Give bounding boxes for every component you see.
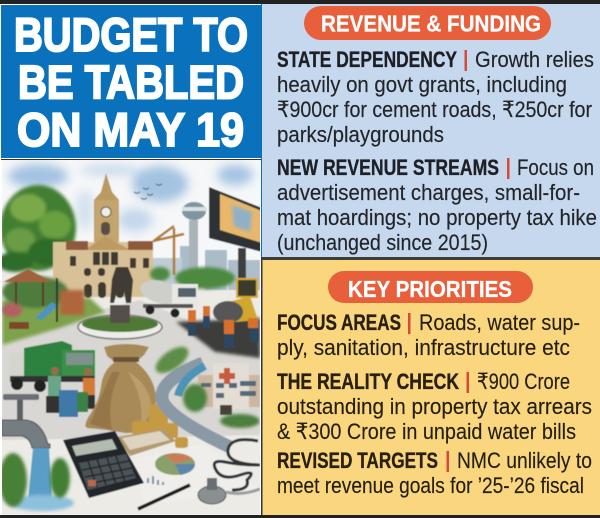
heritage municipal building [53, 173, 153, 298]
shrubs along pipeline [153, 344, 191, 376]
text block: new revenue streams: NEW REVENUE STREAMS [277, 155, 499, 180]
ground and road [2, 298, 260, 440]
flowing water [10, 448, 74, 511]
birds [134, 184, 162, 200]
text block: state dependency: STATE DEPENDENCY [277, 47, 457, 72]
text block: state dependency [277, 47, 594, 147]
text block: revised targets: REVISED TARGETS [277, 448, 438, 473]
heading pill: revenue and funding: REVENUE & FUNDING [321, 10, 541, 36]
park with gazebo and slide [2, 269, 84, 329]
text block: the reality check: THE REALITY CHECK [277, 369, 459, 394]
text block: focus areas [277, 310, 580, 360]
calculator [63, 431, 144, 498]
text block: state dependency: heavily on govt grants, including [277, 72, 567, 97]
title [14, 9, 248, 157]
text block: focus areas: ply, sanitation, infrastructure etc [277, 335, 570, 360]
city budget illustration [0, 159, 262, 515]
tree [0, 185, 76, 272]
coin stacks [132, 404, 188, 448]
water tap [2, 394, 50, 448]
text block: focus areas: Roads, water sup- [419, 310, 580, 335]
panel: revenue and funding [261, 4, 600, 257]
trees behind road [150, 267, 235, 289]
road roller [213, 279, 258, 323]
panel: key priorities [261, 257, 600, 515]
garbage truck [9, 341, 95, 392]
road workers [188, 306, 259, 348]
crane [153, 226, 184, 275]
title: BE TABLED [18, 56, 244, 110]
sky with watercolor clouds [1, 159, 261, 269]
stethoscope [198, 440, 260, 504]
text block: new revenue streams [277, 155, 597, 255]
skyline [152, 246, 260, 290]
title panel [1, 5, 261, 158]
text block: the reality check: ₹900 Crore [477, 369, 570, 394]
billboard [209, 187, 262, 278]
text block: the reality check [277, 369, 592, 444]
money bag [85, 344, 156, 433]
hospital [183, 363, 260, 428]
plants by the tap [0, 453, 70, 507]
text block: focus areas: FOCUS AREAS [277, 310, 401, 335]
title: BUDGET TO [14, 9, 248, 62]
water tower [182, 202, 207, 278]
heading pill: key priorities: KEY PRIORITIES [348, 276, 512, 302]
water pipeline [162, 363, 230, 447]
text block: new revenue streams: (unchanged since 2015) [277, 230, 488, 255]
text block: state dependency: parks/playgrounds [277, 122, 444, 147]
title: ON MAY 19 [17, 104, 244, 157]
statue roundabout [78, 267, 162, 339]
heading pill: revenue and funding [304, 6, 551, 40]
pen [138, 485, 190, 509]
text block: revised targets [277, 448, 592, 498]
cement mixer truck [138, 276, 198, 318]
banknote bundles [117, 429, 176, 456]
sanitation workers with bins [46, 367, 95, 417]
financial chart paper [146, 446, 196, 486]
